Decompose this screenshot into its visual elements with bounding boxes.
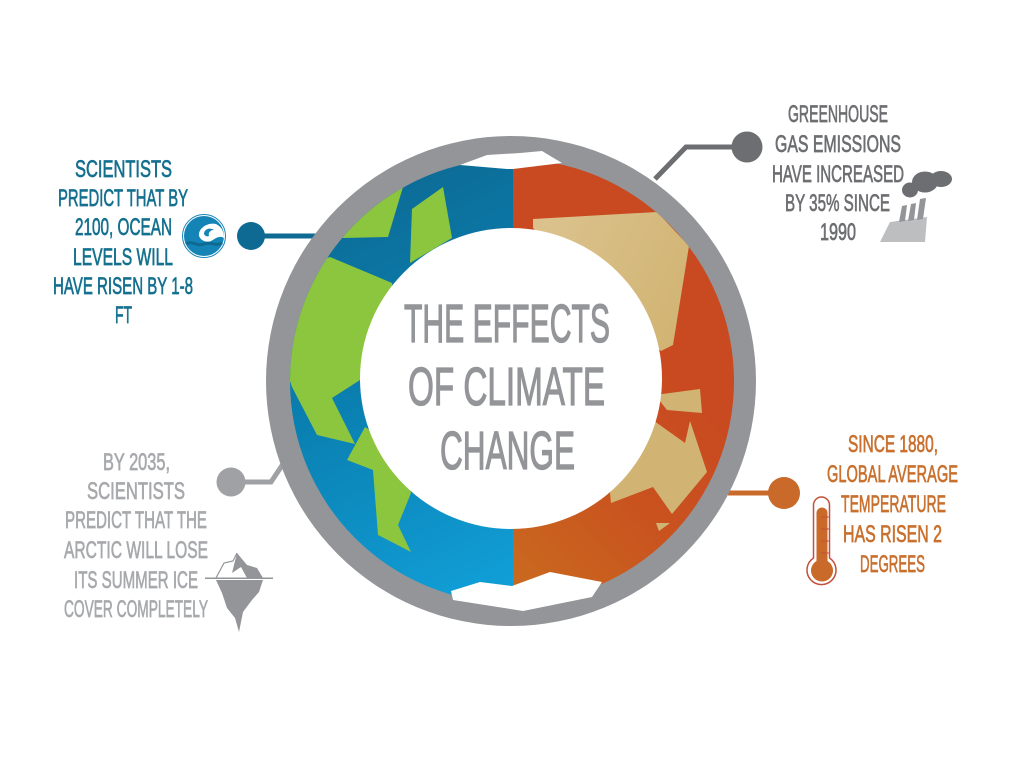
text: temperature: SINCE 1880,	[848, 431, 938, 458]
white centre	[360, 228, 662, 529]
text: ocean levels: 2100, OCEAN	[75, 214, 172, 241]
text: ocean levels: FT	[115, 302, 132, 329]
icon: ocean wave	[182, 214, 226, 258]
connector: ocean callout	[237, 222, 323, 250]
text: greenhouse emissions: GAS EMISSIONS	[775, 131, 901, 158]
text: arctic ice	[64, 449, 208, 623]
text: greenhouse emissions: 1990	[820, 219, 856, 246]
text: arctic ice: ITS SUMMER ICE	[74, 567, 198, 594]
title: CHANGE	[440, 421, 575, 481]
connector: temperature callout	[728, 477, 800, 509]
text: arctic ice: PREDICT THAT THE	[65, 507, 207, 534]
text: temperature	[827, 431, 958, 578]
icon: thermometer	[807, 497, 836, 585]
text: greenhouse emissions: BY 35% SINCE	[785, 190, 890, 217]
text: greenhouse emissions: GREENHOUSE	[788, 101, 888, 128]
globe ring	[266, 136, 756, 626]
text: temperature: HAS RISEN 2	[843, 521, 942, 548]
text: arctic ice: ARCTIC WILL LOSE	[64, 537, 208, 564]
grey outer ring	[266, 136, 756, 626]
text: ocean levels: HAVE RISEN BY 1-8	[53, 273, 193, 300]
text: arctic ice: COVER COMPLETELY	[64, 596, 208, 623]
globe land and ocean	[290, 164, 734, 595]
text: temperature: TEMPERATURE	[841, 491, 946, 518]
text: greenhouse emissions	[772, 101, 904, 246]
title: OF CLIMATE	[408, 357, 605, 417]
text: ocean levels: LEVELS WILL	[73, 244, 173, 271]
text: temperature: DEGREES	[860, 551, 925, 578]
bottom ice cap	[451, 572, 602, 611]
connector: arctic callout	[216, 461, 285, 496]
connector: emissions callout	[655, 132, 762, 179]
text: ocean levels	[53, 156, 193, 329]
title	[404, 294, 610, 481]
title: THE EFFECTS	[404, 294, 610, 354]
text: greenhouse emissions: HAVE INCREASED	[772, 161, 904, 188]
text: arctic ice: SCIENTISTS	[87, 478, 185, 505]
icon: iceberg	[205, 553, 273, 632]
top ice cap	[460, 151, 562, 169]
text: ocean levels: SCIENTISTS	[75, 156, 172, 183]
infographic canvas	[54, 104, 958, 632]
icon: factory	[880, 171, 952, 242]
text: ocean levels: PREDICT THAT BY	[58, 185, 188, 212]
text: arctic ice: BY 2035,	[103, 449, 170, 476]
